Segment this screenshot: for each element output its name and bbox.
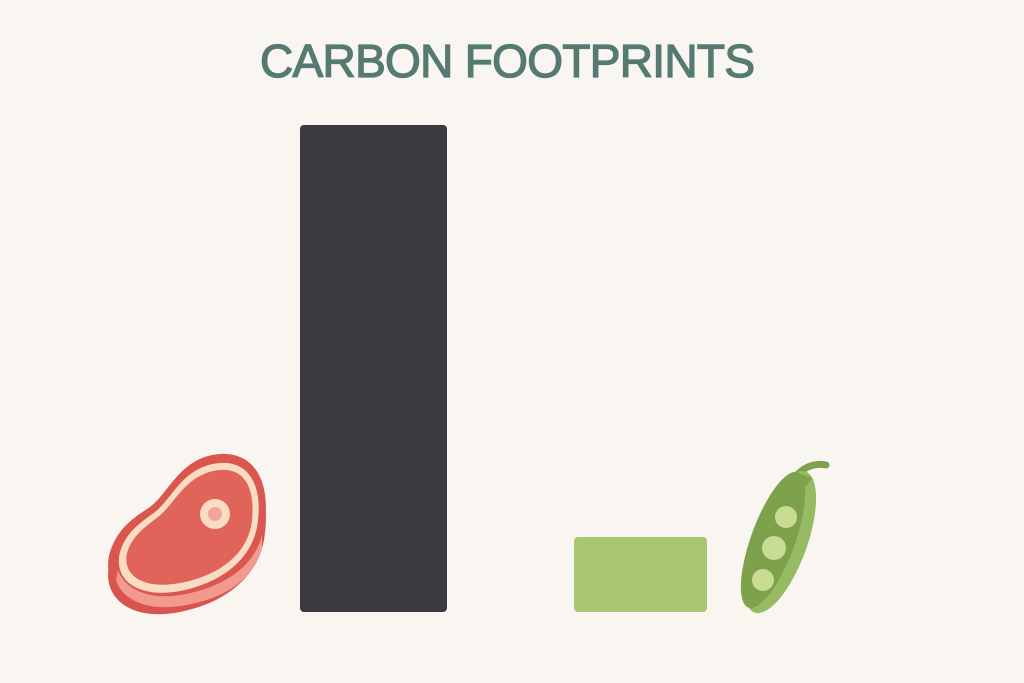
icon: pea pod (728, 462, 831, 622)
title: CARBON FOOTPRINTS (260, 35, 755, 87)
bar: peas (574, 537, 707, 612)
icon: steak (108, 454, 266, 614)
bar: meat (300, 125, 447, 612)
